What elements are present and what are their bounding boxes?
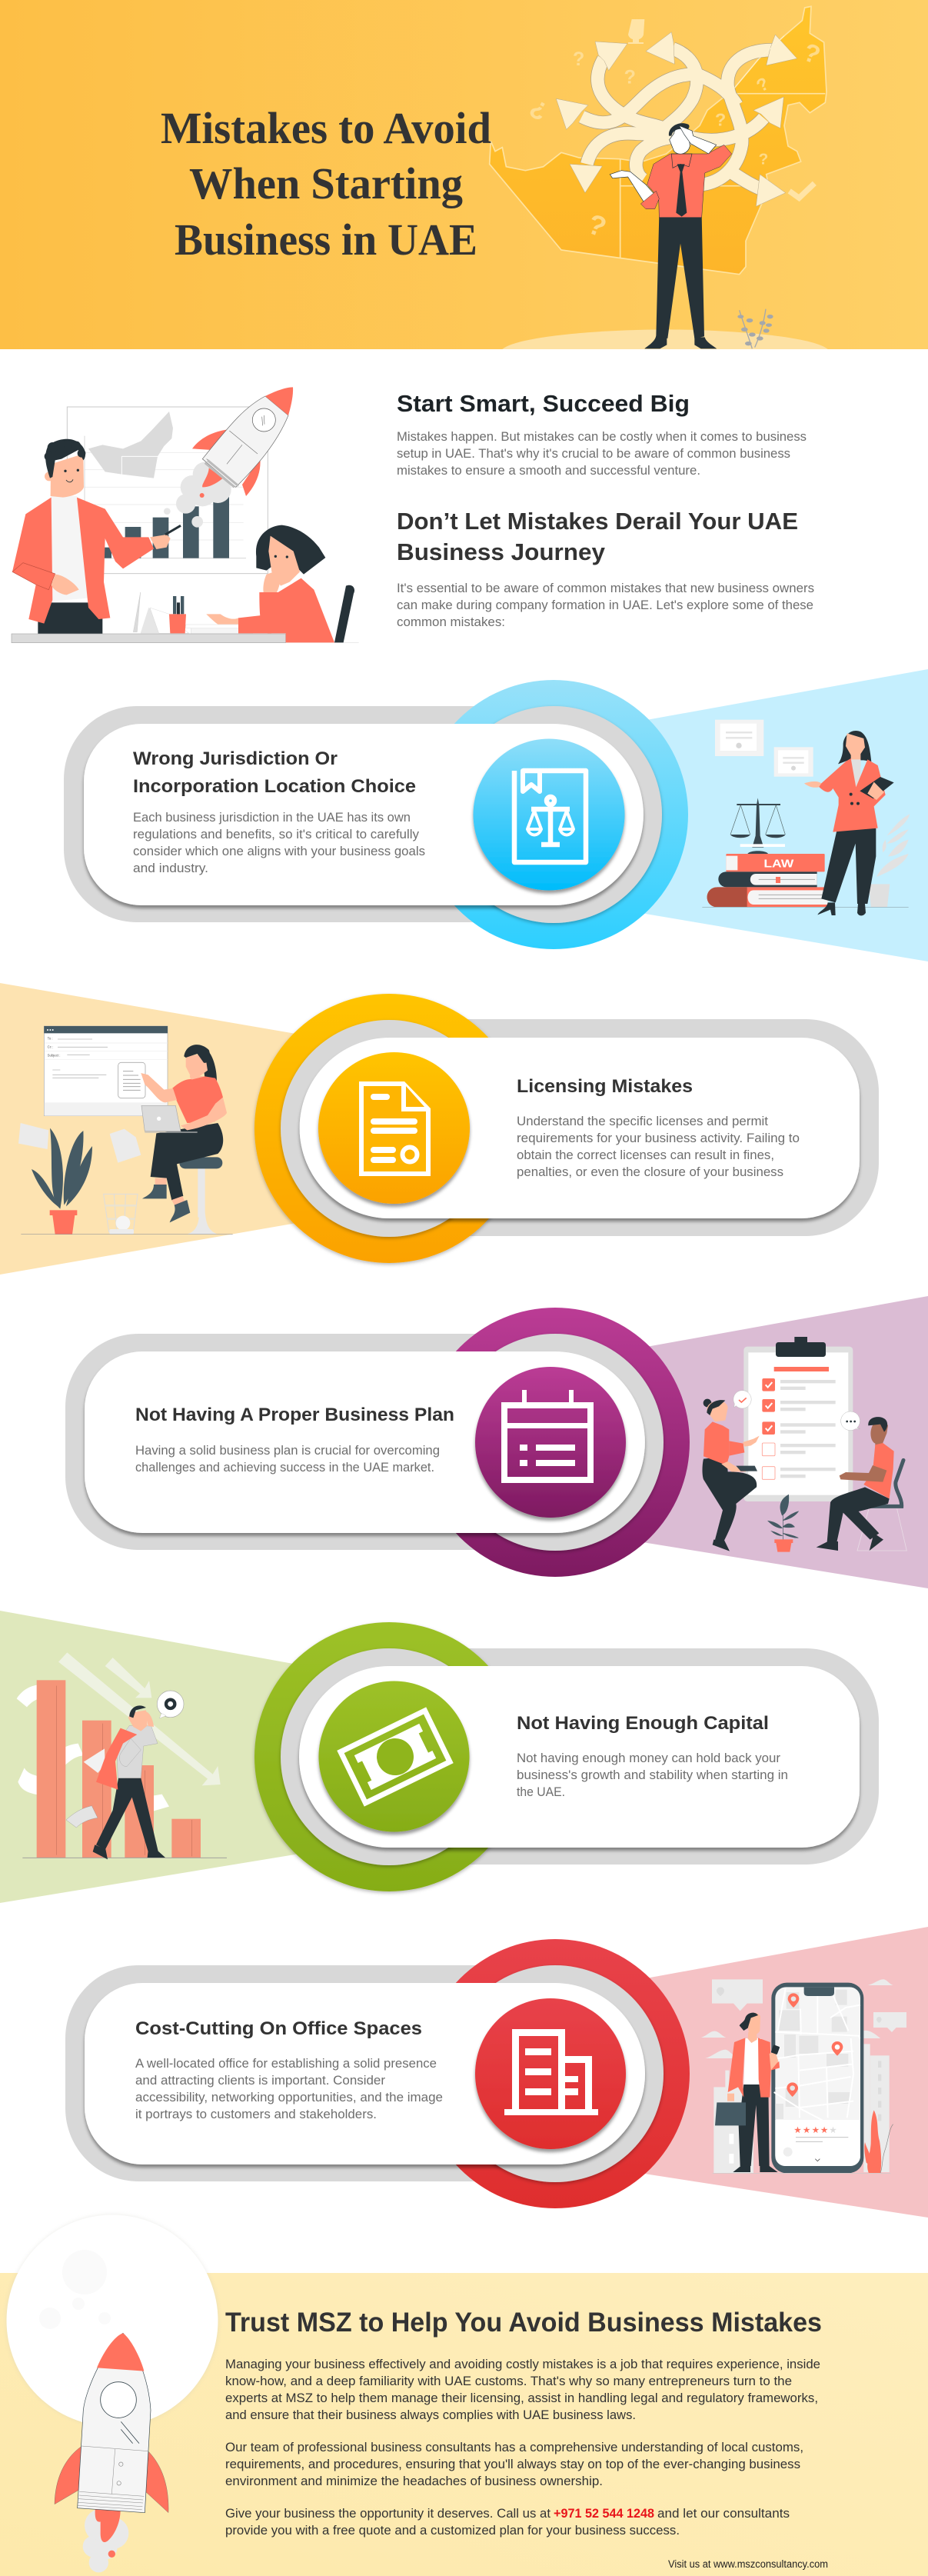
text: office spaces: it portrays to customers and stakeholders. [135, 2108, 377, 2121]
panel: business plan [65, 1296, 928, 1588]
paragraph 3 with phone number: provide you with a free quote and a customized plan for your business success. [225, 2524, 680, 2538]
icon: document [359, 1081, 431, 1176]
heading: start smart: Start Smart, Succeed Big [397, 390, 690, 417]
phone with map: ★ [830, 2127, 837, 2135]
text: office spaces: A well-located office for establishing a solid presence [135, 2057, 437, 2071]
woman working on laptop [141, 1045, 227, 1222]
heading: don't let mistakes [397, 508, 798, 565]
speech bubble with gear [157, 1691, 184, 1718]
paragraph 2: Our team of professional business consultants has a comprehensive understanding of local customs, [225, 2441, 803, 2454]
phone with map: ★ [821, 2127, 828, 2135]
illustration: falling bars and worried man [17, 1652, 227, 1859]
title: When Starting [189, 158, 463, 208]
phone with map [771, 1983, 863, 2173]
stool [179, 1157, 222, 1235]
moon [6, 2215, 218, 2426]
heading: don't let mistakes: Business Journey [397, 538, 606, 565]
text: wrong jurisdiction: and industry. [133, 861, 208, 875]
stack of law books [707, 854, 828, 907]
coral plant [864, 2110, 893, 2173]
text: enough capital: Not Having Enough Capital [517, 1713, 769, 1734]
text: enough capital: Not having enough money can hold back your [517, 1751, 781, 1765]
title: Mistakes to Avoid [161, 103, 491, 153]
scales of justice [730, 798, 785, 854]
text: licensing mistakes: obtain the correct licenses can result in fines, [517, 1148, 774, 1162]
illustration: woman on stool with email window [18, 1026, 233, 1235]
text: wrong jurisdiction [133, 748, 425, 875]
man with briefcase [715, 2013, 780, 2172]
panel: wrong jurisdiction [64, 669, 928, 961]
second paragraph: common mistakes: [397, 615, 505, 629]
standing woman [702, 1399, 760, 1551]
illustration: woman on stool with email window: Subject : [48, 1053, 61, 1057]
small plant [768, 1495, 798, 1552]
paragraph 1 [225, 2358, 820, 2422]
stack of law books: LAW [763, 858, 794, 871]
man figure [610, 123, 732, 348]
icon: law book [514, 771, 586, 862]
paragraph 1: know-how, and a deep familiarity with UAE customs. That's why so many entrepreneurs turn to the [225, 2374, 792, 2388]
text: wrong jurisdiction: regulations and benefits, so it's critical to carefully [133, 828, 420, 841]
text: business plan: challenges and achieving success in the UAE market. [135, 1461, 434, 1475]
illustration: lawyer with law books [702, 720, 910, 915]
illustration: confused man with UAE map and arrows: ? [759, 150, 768, 168]
text: office spaces [135, 2018, 443, 2121]
text: office spaces: accessibility, networking opportunities, and the image [135, 2091, 443, 2104]
illustration: confused man with UAE map and arrows: ? [715, 109, 726, 129]
text: licensing mistakes: penalties, or even the closure of your business [517, 1165, 783, 1179]
paragraph 2: requirements, and procedures, ensuring that you'll always stay on top of the ever-changing business [225, 2458, 800, 2471]
title [161, 103, 491, 265]
arrows [582, 48, 773, 191]
paragraph 2 [225, 2441, 803, 2488]
rocket [55, 2333, 168, 2572]
illustration: confused man with UAE map and arrows [490, 6, 828, 349]
panel: enough capital [0, 1611, 879, 1903]
second paragraph: can make during company formation in UAE. Let's explore some of these [397, 598, 813, 612]
chair [857, 1460, 906, 1551]
presenter man [12, 439, 181, 634]
paragraph 1: Managing your business effectively and avoiding costly mistakes is a job that requires experience, inside [225, 2358, 820, 2371]
waste basket [104, 1194, 138, 1235]
text: business plan: Having a solid business plan is crucial for overcoming [135, 1444, 440, 1458]
intro paragraph: setup in UAE. That's why it's crucial to be aware of common business [397, 447, 790, 461]
text: licensing mistakes: requirements for your business activity. Failing to [517, 1131, 800, 1145]
illustration: confused man with UAE map and arrows: ? [753, 73, 773, 96]
panel: licensing mistakes [0, 983, 879, 1275]
illustration: checklist with two people [702, 1337, 906, 1552]
buildings and clouds [701, 1979, 906, 2173]
heading: trust MSZ: Trust MSZ to Help You Avoid Business Mistakes [225, 2308, 822, 2338]
paragraph 3 with phone number: Give your business the opportunity it deserves. Call us at [225, 2507, 550, 2521]
illustration: confused man with UAE map and arrows: ? [525, 93, 553, 126]
text: business plan [135, 1405, 454, 1475]
illustration: confused man with UAE map and arrows: ? [584, 208, 610, 243]
second paragraph [397, 582, 814, 629]
illustration: confused man with UAE map and arrows: ? [624, 66, 636, 88]
text: licensing mistakes [517, 1076, 800, 1179]
icon: banknote [341, 1711, 450, 1803]
plant [738, 309, 773, 348]
panel: office spaces [65, 1927, 928, 2218]
paragraph 3 with phone number: and let our consultants [657, 2507, 790, 2521]
text: wrong jurisdiction: consider which one aligns with your business goals [133, 845, 425, 858]
seated man [817, 1417, 894, 1551]
icon: office buildings [504, 2029, 598, 2115]
paragraph 1: and ensure that their business always complies with UAE business laws. [225, 2408, 636, 2422]
text: enough capital: the UAE. [517, 1785, 565, 1799]
intro illustration: presenter, rocket and chart [12, 387, 359, 643]
rocket with smoke [164, 387, 293, 528]
worried man [93, 1705, 165, 1859]
speech bubbles [733, 1391, 860, 1431]
illustration: woman on stool with email window: To : [48, 1037, 53, 1041]
paragraph 1: experts at MSZ to help them manage their licensing, assist in handling legal and regulatory frameworks, [225, 2391, 818, 2405]
text: enough capital [517, 1713, 788, 1799]
header banner [0, 0, 928, 349]
intro text [397, 390, 814, 629]
illustration: confused man with UAE map and arrows: ? [800, 38, 824, 70]
text: licensing mistakes: Licensing Mistakes [517, 1076, 693, 1097]
desk with supplies [12, 592, 359, 643]
phone with map: ★ [803, 2127, 810, 2135]
phone with map: ★ [794, 2127, 801, 2135]
intro paragraph: mistakes to ensure a smooth and successful venture. [397, 464, 700, 478]
title: Business in UAE [175, 215, 477, 265]
text: wrong jurisdiction: Each business jurisdiction in the UAE has its own [133, 811, 411, 825]
illustration: woman on stool with email window: Cc : [48, 1045, 53, 1049]
paragraph 3 with phone number [225, 2506, 790, 2538]
text: wrong jurisdiction: Incorporation Location Choice [133, 776, 416, 797]
icon: calendar [501, 1390, 594, 1480]
paragraph 3 with phone number: +971 52 544 1248 [554, 2506, 654, 2521]
text: business plan: Not Having A Proper Business Plan [135, 1405, 454, 1425]
illustration: phone map with man [701, 1979, 906, 2173]
text: wrong jurisdiction: Wrong Jurisdiction Or [133, 748, 338, 769]
second paragraph: It's essential to be aware of common mistakes that new business owners [397, 582, 814, 595]
phone with map: ★ [812, 2127, 819, 2135]
paragraph 2: environment and minimize the headaches of business ownership. [225, 2474, 603, 2488]
panel: trust MSZ footer [0, 2215, 928, 2576]
intro paragraph [397, 430, 807, 478]
potted plant [32, 1128, 92, 1235]
ground ellipse [502, 329, 828, 349]
text: licensing mistakes: Understand the specific licenses and permit [517, 1115, 768, 1128]
website line: Visit us at www.mszconsultancy.com [668, 2558, 828, 2570]
text: enough capital: business's growth and stability when starting in [517, 1768, 788, 1782]
seated woman [206, 525, 354, 642]
text: office spaces: Cost-Cutting On Office Spaces [135, 2018, 422, 2039]
heading: don't let mistakes: Don’t Let Mistakes Derail Your UAE [397, 508, 798, 535]
lawyer woman [804, 731, 894, 915]
intro paragraph: Mistakes happen. But mistakes can be costly when it comes to business [397, 430, 807, 444]
illustration: confused man with UAE map and arrows: ? [573, 48, 584, 70]
text: office spaces: and attracting clients is important. Consider [135, 2074, 386, 2088]
